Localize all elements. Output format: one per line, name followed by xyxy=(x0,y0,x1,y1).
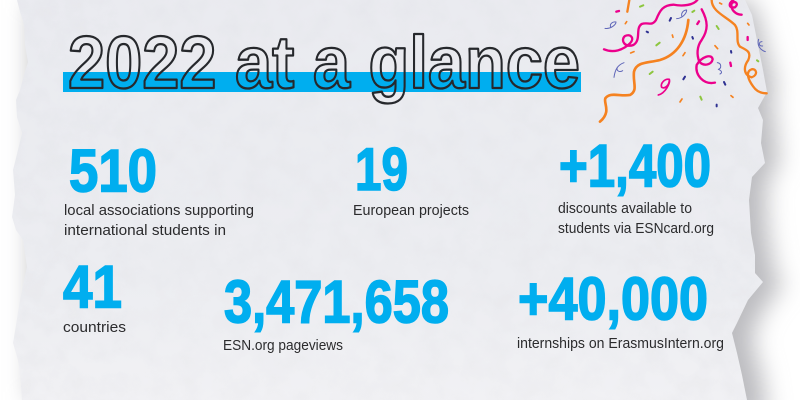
stat: 3,471,658 pageviews xyxy=(223,268,449,354)
stat: 510 local associations: local associations supporting xyxy=(64,202,254,219)
confetti bits: green xyxy=(640,5,758,100)
stat: 510 local associations xyxy=(64,138,254,239)
pink streamers xyxy=(604,0,742,95)
confetti bits: navy xyxy=(647,18,731,106)
purple curls xyxy=(605,10,765,77)
stat: +40,000 internships: internships on ErasmusIntern.org xyxy=(517,335,724,352)
stat: 19 European projects xyxy=(353,136,469,219)
orange streamers xyxy=(600,0,767,122)
stat: +1,400 discounts: discounts available to xyxy=(558,200,692,217)
stat: +40,000 internships: +40,000 xyxy=(518,266,708,332)
stat: 41 countries: 41 xyxy=(63,254,122,320)
stat: 41 countries: countries xyxy=(63,319,126,336)
confetti xyxy=(600,0,767,122)
title highlight bar xyxy=(63,72,581,92)
stat: 3,471,658 pageviews: 3,471,658 xyxy=(224,268,449,336)
stat: 3,471,658 pageviews: ESN.org pageviews xyxy=(223,337,343,354)
stat: +1,400 discounts: +1,400 xyxy=(559,132,711,200)
stat: 19 European projects: 19 xyxy=(355,136,408,203)
title: 2022 at a glance xyxy=(68,21,580,104)
stat: +1,400 discounts xyxy=(558,132,714,237)
confetti bits: pink xyxy=(616,11,748,66)
stat: 19 European projects: European projects xyxy=(353,202,469,219)
confetti bits: orange xyxy=(625,3,749,102)
stat: 510 local associations: international students in xyxy=(64,222,226,239)
stat: +1,400 discounts: students via ESNcard.org xyxy=(558,220,714,237)
stat: 510 local associations: 510 xyxy=(69,138,157,204)
